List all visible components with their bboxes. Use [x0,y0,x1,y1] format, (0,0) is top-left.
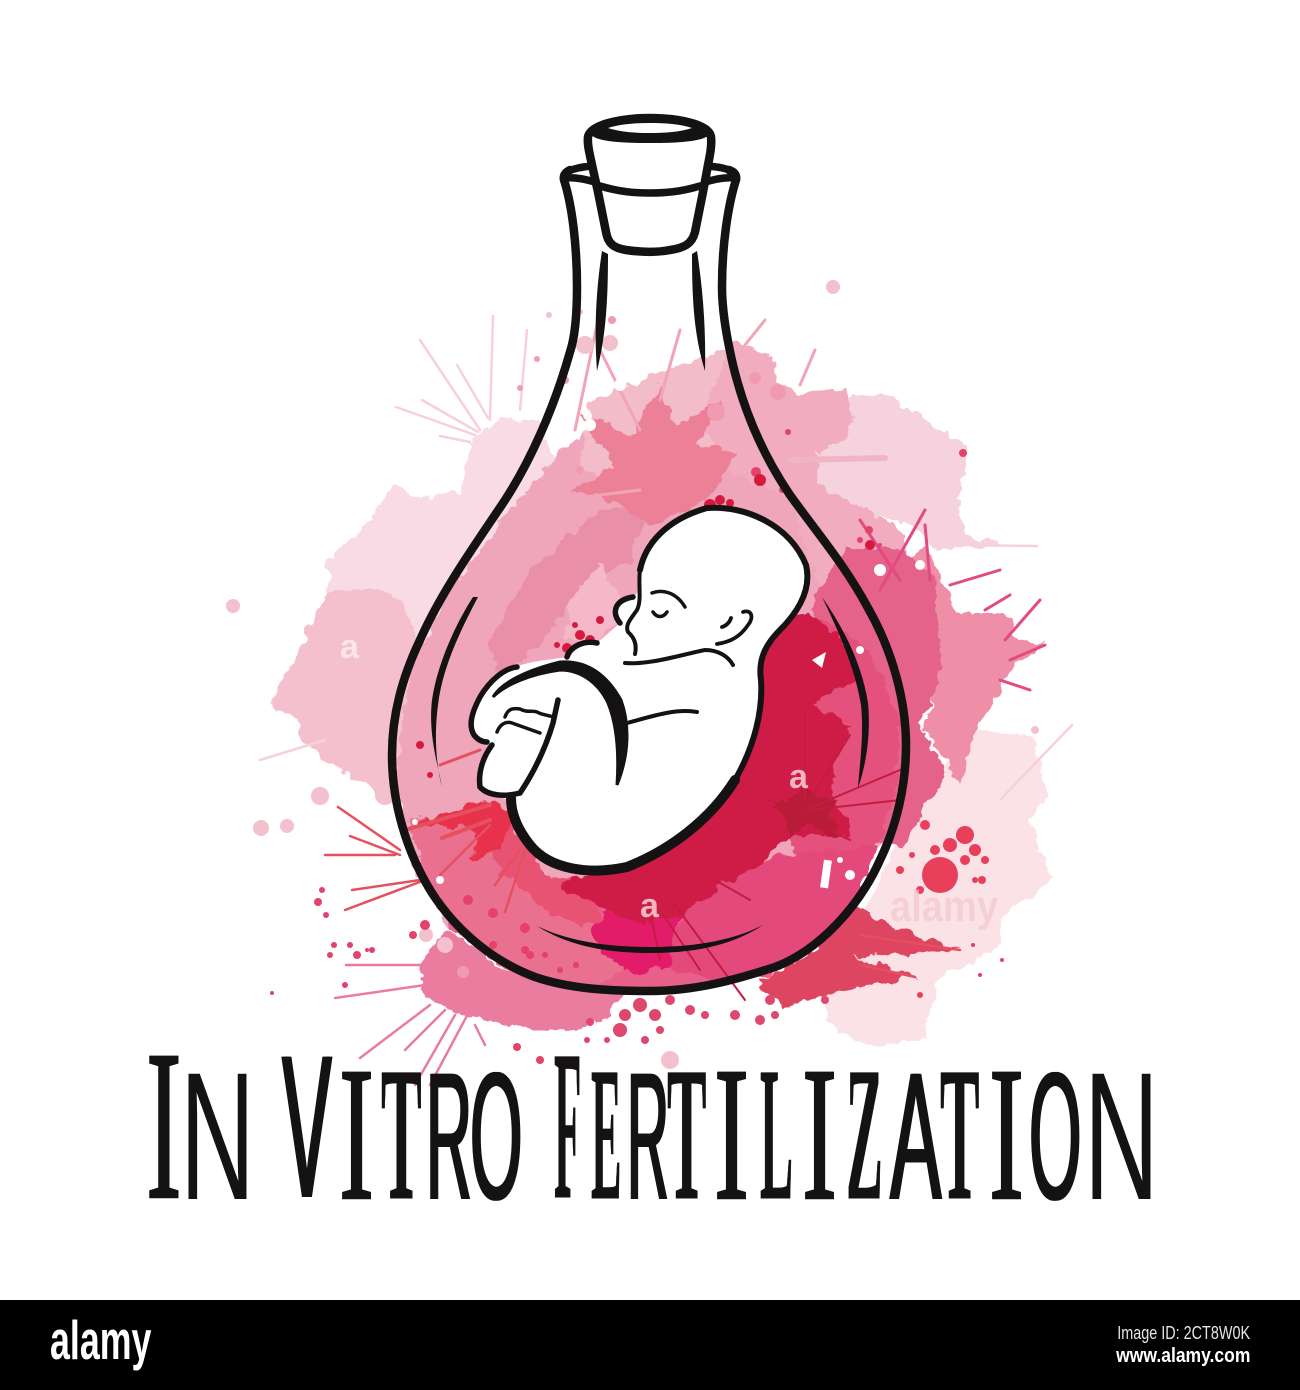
title: N [180,1034,255,1238]
wash: deep reds in lower bottle [407,547,960,1033]
cork band [600,186,700,193]
wash: bottle underlay [395,380,900,992]
baby [470,508,807,871]
bottle outline [392,170,906,991]
website: www.alamy.com [1116,1345,1250,1367]
title: T [381,1029,422,1240]
title: Z [846,1029,883,1240]
baby chest crease [627,711,697,723]
title: I [714,1029,749,1240]
baby thumb [567,597,633,657]
title: N [1084,1034,1159,1238]
title: T [940,1029,979,1240]
glass highlight: left [431,597,478,787]
neck highlights [596,251,705,371]
glass highlight: right [822,597,869,788]
wash: mid pink [490,343,1047,783]
baby foot [480,700,558,795]
title: F [554,1007,581,1244]
title: I [146,1007,182,1244]
footer bar [0,1300,1300,1390]
watermark glyphs: alamy [890,882,998,931]
title: R [626,1034,668,1238]
title: I [802,1029,837,1240]
baby outline [640,508,807,780]
baby face [627,570,640,654]
title: A [889,1034,940,1238]
splat: top centre [570,385,735,525]
title: O [1028,1034,1080,1238]
wash: pale pink [270,393,1053,1047]
title: V [281,1013,330,1241]
watermark glyphs: a [340,628,360,666]
baby brow and eye [652,591,685,616]
baby back [511,780,735,871]
watercolor splatter [226,280,1072,1085]
title: T [667,1029,706,1240]
title: E [591,1029,622,1240]
glass highlight: bottom [537,925,763,953]
baby chin [625,650,733,665]
splatter droplets [226,280,1039,1069]
title: L [760,1029,793,1240]
splatter rays [260,316,1072,1085]
watermark glyphs [340,628,998,931]
baby leg [493,662,627,785]
bottle [392,118,906,991]
image id: Image ID: 2CT8W0K [1117,1323,1250,1343]
baby ankle [497,709,553,733]
baby hand [471,667,517,742]
baby body [470,508,807,871]
title: I [339,1029,374,1240]
logo: alamy [50,1309,151,1371]
watermark glyphs: a [789,758,809,796]
watermark glyphs: a [640,887,660,925]
title: I [989,1029,1024,1240]
title: O [469,1034,521,1238]
title: R [425,1034,471,1238]
cork [588,118,711,252]
bottle lip [564,166,736,192]
baby ear [717,611,751,644]
cork opening [608,123,692,133]
